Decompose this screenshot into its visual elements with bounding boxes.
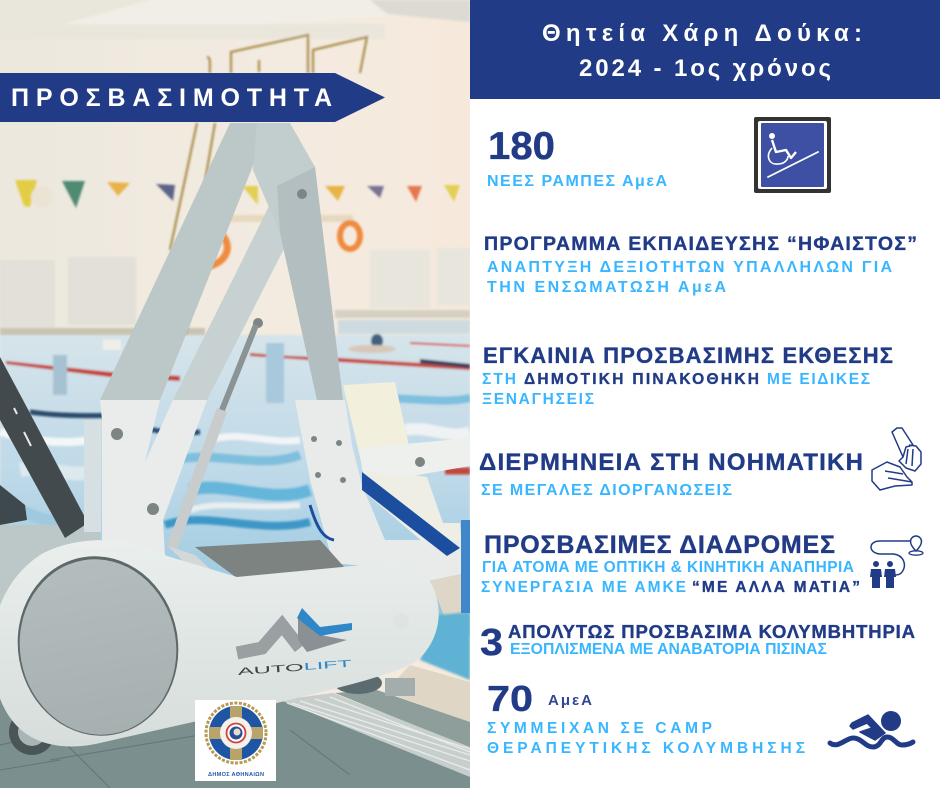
icon: wheelchair ramp sign — [754, 117, 831, 193]
AutoLift logo: AUTO — [237, 662, 305, 678]
water reflections — [0, 398, 470, 526]
header line one: Θητεία Χάρη Δούκα: — [542, 20, 862, 47]
lift seat and strap — [295, 382, 470, 613]
text block: sign language interpretation — [479, 449, 863, 499]
panel: right column background — [470, 0, 940, 788]
ramps caption: ΝΕΕΣ ΡΑΜΠΕΣ ΑμεΑ — [487, 173, 667, 190]
icon: swimmer — [830, 711, 913, 747]
training description: ΑΝΑΠΤΥΞΗ ΔΕΞΙΟΤΗΤΩΝ ΥΠΑΛΛΗΛΩΝ ΓΙΑ — [487, 259, 892, 276]
stat: 70 participants: 70 — [487, 678, 533, 719]
logo caption: ΔΗΜΟΣ ΑΘΗΝΑΙΩΝ — [208, 772, 264, 778]
pools heading: ΑΠΟΛΥΤΩΣ ΠΡΟΣΒΑΣΙΜΑ ΚΟΛΥΜΒΗΤΗΡΙΑ — [508, 621, 915, 642]
exhibition description: ΜΕ ΕΙΔΙΚΕΣ — [767, 371, 870, 388]
stat: 180 new ramps — [487, 125, 667, 190]
text block: accessible routes: ΠΡΟΣΒΑΣΙΜΕΣ ΔΙΑΔΡΟΜΕΣ — [484, 531, 835, 559]
training description: ΤΗΝ ΕΝΣΩΜΑΤΩΣΗ ΑμεΑ — [487, 279, 726, 296]
icon: route with people — [870, 536, 923, 588]
routes description — [481, 559, 860, 596]
lift frame arms — [0, 123, 343, 556]
camp description — [487, 720, 805, 757]
exhibition description: ΣΤΗ — [482, 371, 516, 388]
exhibition description: ΞΕΝΑΓΗΣΕΙΣ — [482, 391, 594, 408]
banner title: ΠΡΟΣΒΑΣΙΜΟΤΗΤΑ — [11, 84, 332, 112]
participants unit: ΑμεΑ — [548, 692, 592, 709]
camp description: ΣΥΜΜΕΙΧΑΝ ΣΕ CAMP — [487, 720, 712, 737]
text block: accessible exhibition — [482, 343, 893, 408]
stat: 180 new ramps: 180 — [488, 125, 555, 168]
training description — [487, 259, 892, 296]
text block: three accessible pools — [480, 621, 915, 664]
pool deck and floor — [0, 525, 470, 788]
lift base with wheel cover — [0, 540, 439, 755]
icon: signing hands — [872, 428, 921, 490]
routes description: ΣΥΝΕΡΓΑΣΙΑ ΜΕ ΑΜΚΕ — [481, 579, 686, 596]
text block: Hephaestus training: ΠΡΟΓΡΑΜΜΑ ΕΚΠΑΙΔΕΥΣΗΣ “ΗΦΑΙΣΤΟΣ” — [484, 233, 917, 255]
camp description: ΘΕΡΑΠΕΥΤΙΚΗΣ ΚΟΛΥΜΒΗΣΗΣ — [487, 740, 805, 757]
header: term title — [470, 0, 940, 99]
AutoLift logo: LIFT — [303, 659, 352, 673]
routes description: “ΜΕ ΑΛΛΑ ΜΑΤΙΑ” — [692, 579, 860, 596]
pool hall background — [0, 0, 470, 635]
text block: accessible exhibition: ΕΓΚΑΙΝΙΑ ΠΡΟΣΒΑΣΙΜΗΣ ΕΚΘΕΣΗΣ — [483, 343, 893, 368]
interpretation description: ΣΕ ΜΕΓΑΛΕΣ ΔΙΟΡΓΑΝΩΣΕΙΣ — [481, 482, 732, 499]
text block: Hephaestus training — [484, 233, 917, 296]
logo: Municipality of Athens — [195, 700, 276, 781]
routes description: ΓΙΑ ΑΤΟΜΑ ΜΕ ΟΠΤΙΚΗ & ΚΙΝΗΤΙΚΗ ΑΝΑΠΗΡΙΑ — [482, 559, 854, 576]
panel: pool lift photograph — [0, 0, 470, 788]
stat: 70 participants — [487, 678, 805, 757]
text block: sign language interpretation: ΔΙΕΡΜΗΝΕΙΑ ΣΤΗ ΝΟΗΜΑΤΙΚΗ — [479, 449, 863, 476]
text block: three accessible pools: 3 — [480, 622, 503, 664]
header line two: 2024 - 1ος χρόνος — [579, 55, 831, 82]
banner: section title arrow — [0, 73, 385, 122]
AutoLift logo — [237, 608, 352, 678]
exhibition description: ΔΗΜΟΤΙΚΗ ΠΙΝΑΚΟΘΗΚΗ — [524, 371, 759, 388]
exhibition description — [482, 371, 870, 408]
text block: accessible routes — [481, 531, 860, 596]
pools description: ΕΞΟΠΛΙΣΜΕΝΑ ΜΕ ΑΝΑΒΑΤΟΡΙΑ ΠΙΣΙΝΑΣ — [510, 641, 827, 658]
